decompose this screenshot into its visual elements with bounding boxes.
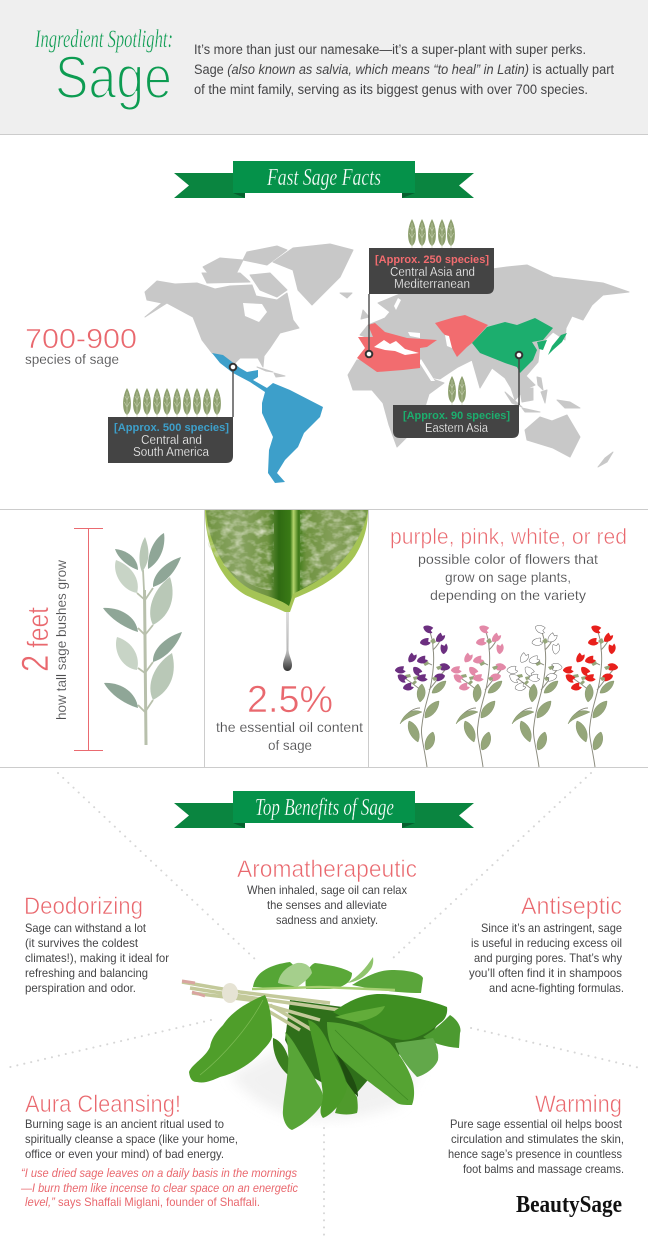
dotted dividers (6, 773, 640, 1240)
dark leaf mass (285, 1000, 440, 1095)
world map (108, 219, 629, 483)
stat: 700-900 species: species of sage (25, 351, 119, 367)
callout: Central and South America: Central and (141, 433, 202, 447)
purple plant (394, 625, 451, 767)
stat: flower colors: depending on the variety (430, 587, 586, 603)
benefit: Deodorizing: refreshing and balancing (25, 966, 148, 980)
benefit: Aromatherapeutic: When inhaled, sage oil can relax (247, 883, 407, 897)
red plant (562, 625, 619, 767)
upper right leaf (333, 994, 447, 1040)
benefit: Aromatherapeutic: Aromatherapeutic (237, 856, 417, 883)
benefit: Warming: hence sage’s presence in countless (448, 1147, 622, 1161)
benefit: Antiseptic: and purging pores. That’s why (474, 951, 622, 965)
benefit: Warming: Pure sage essential oil helps boost (450, 1117, 623, 1131)
benefit: Deodorizing (24, 893, 169, 995)
large lower leaf (327, 1022, 414, 1105)
stat: 700-900 species (25, 323, 137, 367)
stat: 2.5% (216, 679, 363, 753)
benefit: Aromatherapeutic: sadness and anxiety. (276, 913, 378, 927)
stat: 2 feet: 2 feet (15, 606, 57, 672)
benefit: Aura Cleansing (20, 1091, 298, 1209)
benefit: Aura Cleansing: office or even your mind) of bad energy. (25, 1147, 224, 1161)
stat: flower colors: possible color of flowers that (418, 551, 598, 567)
stat: 2.5%: the essential oil content (216, 719, 363, 735)
left leaf (189, 995, 272, 1083)
callout: Eastern Asia (393, 352, 522, 438)
stems and twine (182, 981, 395, 1030)
intro text: Sage (also known as salvia, which means “to heal” in Latin) is actually part (194, 62, 614, 77)
banner: Top Benefits of Sage: Top Benefits of Sage (255, 795, 394, 821)
callout: Central and South America: South America (133, 445, 209, 459)
quote: “I use dried sage leaves on a daily basis in the mornings (21, 1166, 297, 1180)
benefit: Antiseptic: and acne-fighting formulas. (489, 981, 624, 995)
benefit: Deodorizing: Sage can withstand a lot (25, 921, 147, 935)
title: Sage (55, 44, 172, 111)
center leaf (308, 1020, 347, 1118)
benefit: Antiseptic: is useful in reducing excess oil (471, 936, 622, 950)
map: Central and South America (212, 353, 323, 483)
map: Eastern Asia (472, 318, 567, 373)
pink plant (450, 625, 507, 767)
benefit: Deodorizing: perspiration and odor. (25, 981, 136, 995)
stat: 2 feet (15, 559, 69, 720)
callout: Central Asia and Mediterranean: Central Asia and (390, 265, 475, 279)
intro text: It’s more than just our namesake—it’s a super-plant with super perks. (194, 42, 586, 57)
benefit: Warming: circulation and stimulates the skin, (451, 1132, 624, 1146)
quote (20, 1166, 298, 1209)
callout: Eastern Asia: Eastern Asia (425, 421, 488, 435)
intro text (194, 42, 614, 97)
benefit: Aromatherapeutic: the senses and alleviate (267, 898, 387, 912)
callout: Central and South America (108, 364, 236, 463)
map: Mediterranean sea (374, 332, 452, 355)
stat: flower colors: purple, pink, white, or red (390, 524, 627, 549)
illustration: sage sprig (103, 533, 182, 745)
stat: 700-900 species: 700-900 (25, 323, 137, 354)
callout: Central Asia and Mediterranean: [Approx. 250 species] (375, 254, 489, 266)
stat: 2.5%: 2.5% (247, 679, 333, 721)
benefit: Antiseptic: you’ll often find it in shampoos (469, 966, 622, 980)
stat: 2.5%: of sage (268, 737, 312, 753)
callout: Central Asia and Mediterranean (366, 219, 494, 357)
logo: BeautySage: BeautySage (516, 1192, 622, 1218)
map: gray land (145, 244, 629, 467)
oil drip (283, 612, 292, 671)
illustration: flowering sage plants (394, 625, 619, 767)
benefit: Aura Cleansing: spiritually cleanse a space (like your home, (25, 1132, 238, 1146)
quote: —I burn them like incense to clear space on an energetic (20, 1181, 298, 1195)
benefit: Warming: foot balms and massage creams. (463, 1162, 624, 1176)
benefit: Aura Cleansing: Burning sage is an ancient ritual used to (25, 1117, 224, 1131)
image: green leaf with oil drop (205, 510, 368, 671)
benefit: Aura Cleansing: Aura Cleansing! (25, 1091, 181, 1118)
small lower leaf (335, 1080, 358, 1114)
benefit: Antiseptic (469, 893, 624, 995)
benefit: Deodorizing: climates!), making it ideal for (25, 951, 169, 965)
benefit: Antiseptic: Antiseptic (521, 893, 622, 920)
callout: Central Asia and Mediterranean: Mediterranean (394, 277, 470, 291)
header kicker: Ingredient Spotlight: (34, 26, 173, 53)
stat: flower colors (390, 524, 627, 603)
map: seas (243, 298, 435, 381)
callout: Central and South America: [Approx. 500 species] (114, 422, 229, 434)
callout: Eastern Asia: [Approx. 90 species] (403, 410, 510, 422)
benefit: Warming: Warming (535, 1091, 622, 1118)
bottom center leaf (283, 1032, 324, 1130)
stat: flower colors: grow on sage plants, (445, 569, 571, 585)
facts panel dividers (0, 509, 648, 768)
benefit: Antiseptic: Since it’s an astringent, sage (481, 921, 622, 935)
banner: Top Benefits of Sage (174, 791, 474, 828)
benefit: Deodorizing: (it survives the coldest (25, 936, 139, 950)
quote: level,” says Shaffali Miglani, founder of Shaffali. (25, 1195, 260, 1209)
pale curled leaf (278, 963, 312, 987)
map: Central Asia and Mediterranean (357, 315, 488, 372)
header panel (0, 0, 648, 135)
benefit: Deodorizing: Deodorizing (24, 893, 143, 920)
benefit: Warming (448, 1091, 624, 1176)
intro text: of the mint family, serving as its biggest genus with over 700 species. (194, 82, 588, 97)
height ruler (74, 528, 103, 750)
benefit: Aromatherapeutic (237, 856, 417, 927)
back leaves (253, 962, 461, 1097)
stat: 2 feet: how tall sage bushes grow (53, 559, 69, 720)
white plant (506, 625, 563, 767)
banner: Fast Sage Facts (174, 161, 474, 198)
bouquet shadow (230, 1040, 420, 1120)
image: sage bouquet (182, 957, 461, 1130)
banner: Fast Sage Facts: Fast Sage Facts (266, 165, 381, 191)
